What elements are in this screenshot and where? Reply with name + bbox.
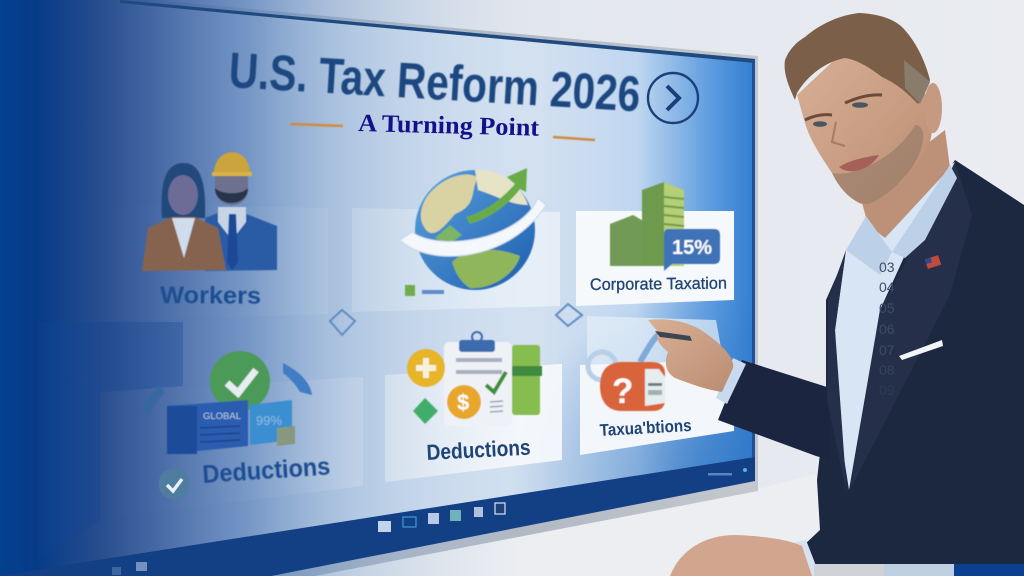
presenter neck [860,130,950,238]
bottom-right colour strips [814,564,1024,576]
presenter shirt [835,162,955,490]
overlay list numbers: 04 [879,279,895,295]
left blue gradient overlay [0,0,520,576]
title: U.S. Tax Reform 2026 [227,42,642,122]
icon: corporate buildings: 15% [672,237,712,259]
icon: clipboard with coins: $ [457,390,469,415]
presenter pocket square [899,340,943,360]
panel: workers [80,203,328,322]
presenter pointing hand [648,319,733,392]
icon: global tax card with check: 99% [256,413,282,428]
panel: lower right upper patch [587,316,734,420]
screen right edge [752,60,755,480]
screen taskbar [0,457,755,576]
icon: question badge with document: ? [612,372,633,411]
presenter sleeve pointing arm [718,360,830,460]
overlay list numbers: 07 [879,342,895,358]
panel: global [352,208,560,312]
icon: question badge with document [588,330,665,411]
panel: lower middle deductions [385,364,562,482]
label: taxation right: Taxua'btions [599,416,692,440]
icon: global tax card with check [142,351,312,454]
presenter collar [846,165,957,275]
decorative orange rules [290,124,595,140]
presenter jacket [804,160,1024,576]
presenter resting hand [670,535,812,576]
icon: global tax card with check: GLOBAL [203,411,241,422]
icon: globe [400,168,546,296]
icon: check badge [158,468,190,500]
presenter [648,13,1024,576]
panel: corporate taxation [576,211,734,306]
icon: workers [142,152,277,271]
presenter head [785,13,942,204]
overlay list numbers: 05 [879,300,895,316]
overlay list numbers: 09 [879,382,895,398]
overlay list numbers: 06 [879,321,895,337]
presenter flag pin [925,255,941,269]
presenter lapels [827,162,972,495]
overlay list numbers: 08 [879,362,895,378]
dark corner block [38,322,183,560]
icon: corporate buildings [610,182,720,271]
table surface [300,470,830,576]
label: corporate taxation: Corporate Taxation [590,275,727,294]
presenter cuff [716,358,746,404]
presenter lower cuff [795,540,820,576]
display screen [0,0,758,576]
label: deductions middle: Deductions [426,435,531,465]
presenter pen [655,331,692,341]
label: workers: Workers [160,282,261,310]
overlay list numbers [879,259,895,398]
label: deductions left: Deductions [202,453,331,489]
icon: circled arrow [648,73,698,123]
icon: clipboard with coins [407,332,542,426]
subtitle: A Turning Point [358,110,540,142]
panel: lower left deductions [103,377,363,518]
overlay list numbers: 03 [879,259,895,275]
icon: connector diamonds [330,304,582,335]
panel: lower right taxation [580,360,734,455]
screen top edge [120,0,755,63]
